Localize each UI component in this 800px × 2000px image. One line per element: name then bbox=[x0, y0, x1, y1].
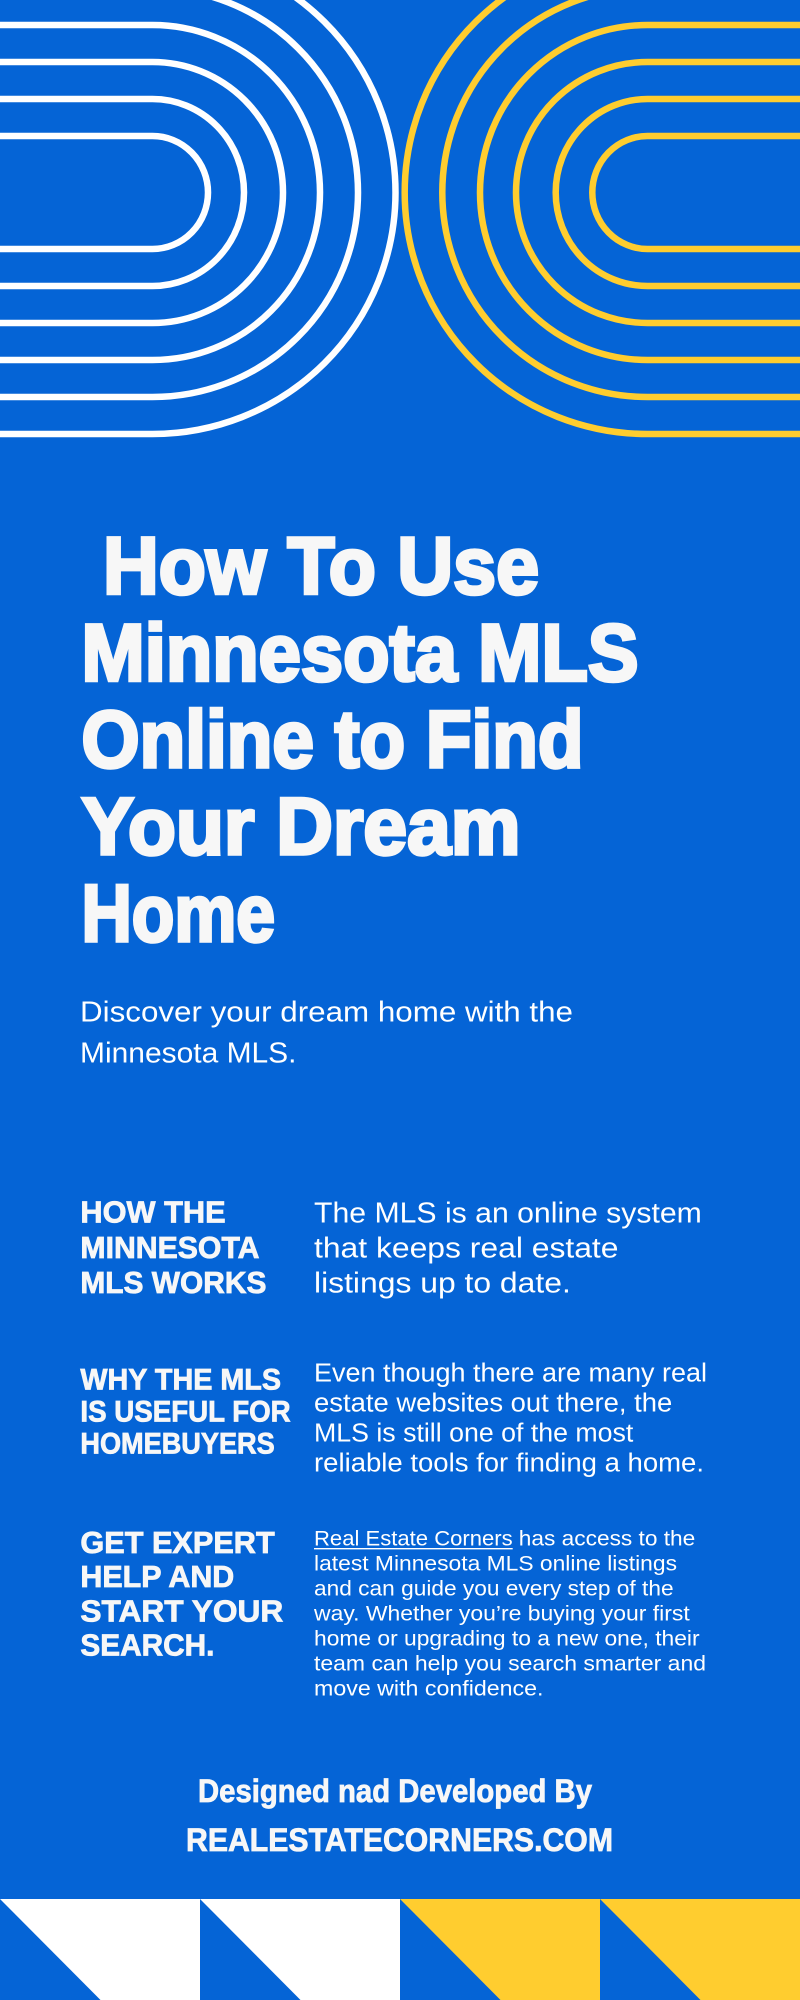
icon: yellow concentric arches bbox=[405, 0, 800, 434]
text block: how the MLS works: that keeps real estate bbox=[314, 1233, 618, 1265]
subtitle: Discover your dream home with the bbox=[80, 997, 573, 1029]
text block: get expert help: Real Estate Corners bbox=[314, 1528, 513, 1551]
title bbox=[82, 521, 638, 959]
title: Online to Find bbox=[82, 695, 584, 785]
bottom triangle band bbox=[0, 1899, 800, 2000]
subtitle: Minnesota MLS. bbox=[80, 1037, 296, 1069]
text block: get expert help bbox=[313, 1528, 706, 1701]
heading: how the Minnesota MLS works: MLS WORKS bbox=[80, 1265, 266, 1300]
text block: why the MLS is useful: Even though there are many real bbox=[314, 1360, 707, 1388]
text block: get expert help: move with confidence. bbox=[314, 1678, 544, 1701]
icon: white concentric arches bbox=[0, 0, 396, 434]
heading: get expert help and start your search: GET EXPERT bbox=[80, 1525, 275, 1560]
heading: get expert help and start your search: START YOUR bbox=[80, 1593, 283, 1628]
text block: why the MLS is useful: estate websites out there, the bbox=[314, 1390, 672, 1418]
footer credit bbox=[186, 1773, 613, 1858]
subtitle bbox=[80, 997, 573, 1069]
text block: how the MLS works: The MLS is an online system bbox=[314, 1198, 702, 1230]
title: Home bbox=[82, 869, 275, 959]
text block: how the MLS works: listings up to date. bbox=[314, 1268, 571, 1300]
heading: how the Minnesota MLS works bbox=[80, 1194, 266, 1300]
title: Minnesota MLS bbox=[82, 608, 638, 698]
footer credit: Designed nad Developed By bbox=[198, 1773, 592, 1809]
text block: how the MLS works bbox=[314, 1198, 702, 1300]
text block: why the MLS is useful: MLS is still one of the most bbox=[314, 1420, 633, 1448]
text block: get expert help: home or upgrading to a new one, their bbox=[314, 1628, 700, 1651]
text block: get expert help: and can guide you every step of the bbox=[314, 1578, 674, 1601]
heading: how the Minnesota MLS works: MINNESOTA bbox=[80, 1230, 260, 1265]
footer credit: REALESTATECORNERS.COM bbox=[186, 1822, 613, 1858]
title: How To Use bbox=[103, 521, 539, 611]
heading: get expert help and start your search: HELP AND bbox=[80, 1559, 234, 1594]
text block: get expert help: team can help you search smarter and bbox=[314, 1653, 706, 1676]
text block: get expert help: latest Minnesota MLS online listings bbox=[314, 1553, 677, 1576]
heading: how the Minnesota MLS works: HOW THE bbox=[80, 1194, 226, 1229]
title: Your Dream bbox=[82, 782, 520, 872]
heading: why the MLS is useful for homebuyers bbox=[80, 1364, 291, 1461]
text block: why the MLS is useful: reliable tools for finding a home. bbox=[314, 1450, 704, 1478]
heading: get expert help and start your search: SEARCH. bbox=[80, 1627, 214, 1662]
text block: get expert help: has access to the bbox=[519, 1528, 695, 1551]
heading: get expert help and start your search bbox=[80, 1525, 283, 1662]
heading: why the MLS is useful for homebuyers: HOMEBUYERS bbox=[80, 1428, 275, 1461]
heading: why the MLS is useful for homebuyers: WHY THE MLS bbox=[80, 1364, 281, 1397]
text block: why the MLS is useful bbox=[314, 1360, 707, 1478]
text block: get expert help: way. Whether you’re buying your first bbox=[313, 1603, 690, 1626]
heading: why the MLS is useful for homebuyers: IS USEFUL FOR bbox=[80, 1395, 291, 1428]
